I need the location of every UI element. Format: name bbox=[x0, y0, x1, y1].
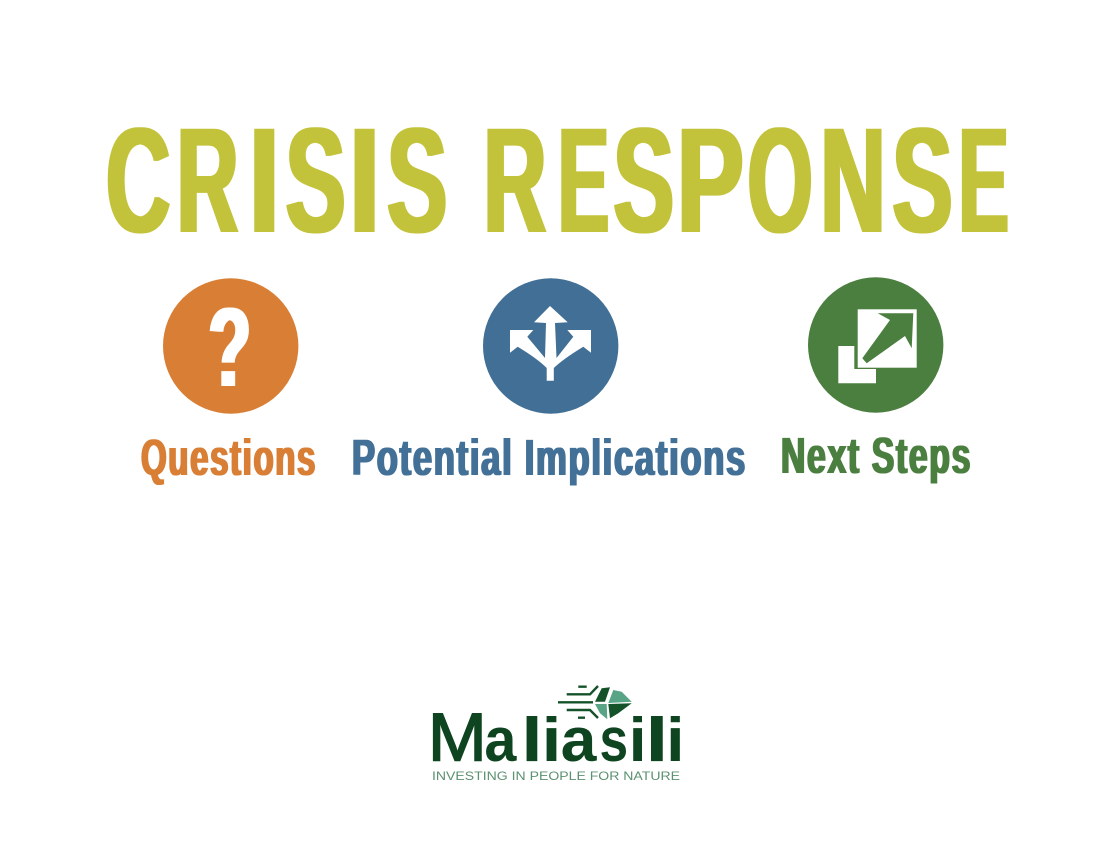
icon: questions bbox=[163, 278, 298, 414]
title: S bbox=[613, 96, 674, 264]
logo wordmark: s bbox=[600, 706, 628, 775]
logo wordmark: l bbox=[521, 706, 543, 775]
title: P bbox=[677, 96, 744, 264]
icon: next steps bbox=[808, 277, 943, 413]
icon: questions: ? bbox=[208, 285, 251, 410]
logo tagline: INVESTING IN PEOPLE FOR NATURE bbox=[432, 769, 680, 783]
text: E bbox=[959, 96, 1008, 264]
logo wordmark: l bbox=[645, 706, 669, 775]
label: potential implications: Potential Implications bbox=[352, 429, 747, 486]
logo wordmark: i bbox=[629, 706, 647, 775]
logo wordmark: a bbox=[561, 706, 597, 775]
title: R bbox=[177, 96, 238, 264]
title: C bbox=[106, 96, 170, 264]
title: S bbox=[892, 96, 952, 264]
title: S bbox=[387, 96, 447, 264]
icon: leaf and circuit lines bbox=[558, 686, 632, 719]
title: S bbox=[286, 96, 346, 264]
logo wordmark: i bbox=[666, 706, 684, 775]
logo wordmark: a bbox=[484, 706, 517, 775]
label: questions: Questions bbox=[141, 429, 317, 486]
title: E bbox=[558, 96, 609, 264]
title: R bbox=[484, 96, 546, 264]
title: I bbox=[349, 96, 380, 264]
title: N bbox=[820, 96, 886, 264]
title: I bbox=[249, 96, 280, 264]
label: next steps: Next Steps bbox=[781, 427, 972, 484]
logo: Maliasili bbox=[428, 686, 684, 783]
logo wordmark: i bbox=[542, 706, 562, 775]
icon: potential implications bbox=[483, 278, 618, 414]
logo wordmark: M bbox=[428, 700, 487, 776]
title: O bbox=[748, 96, 813, 264]
